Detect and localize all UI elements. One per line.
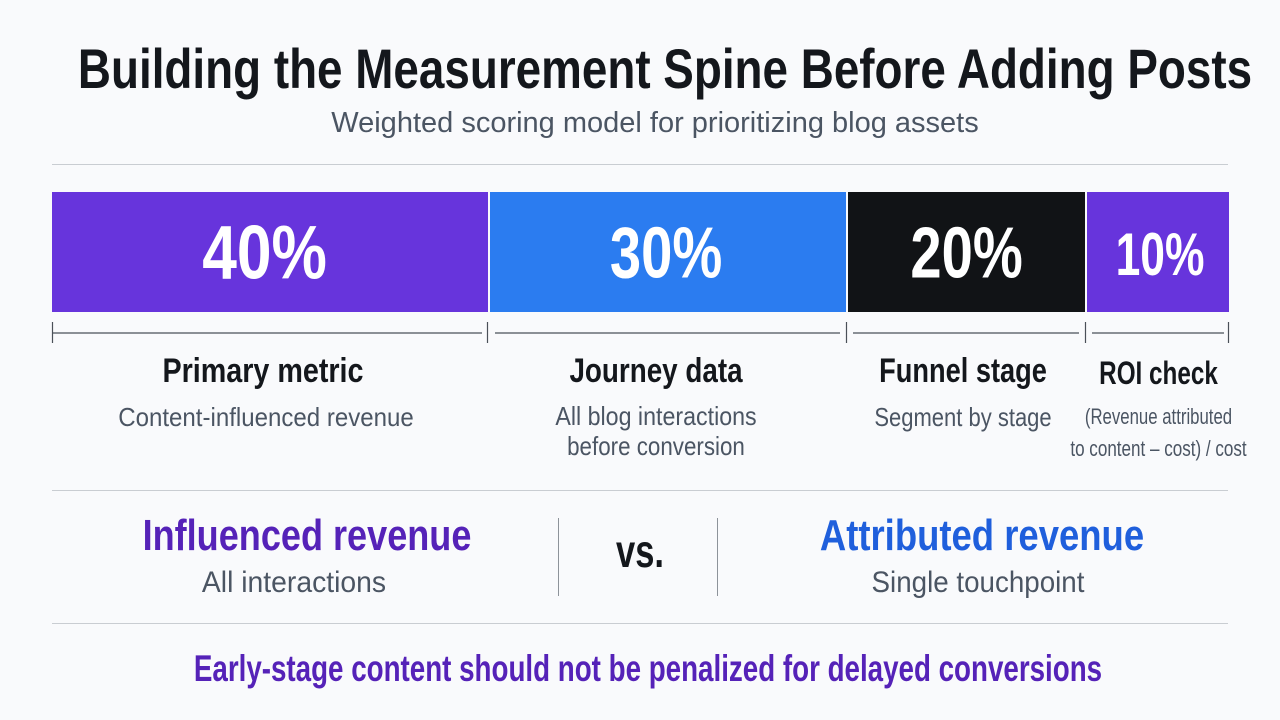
column: journey data: [555, 352, 757, 461]
segment 10%: [1087, 192, 1229, 312]
comparison: attributed revenue: [820, 511, 1144, 599]
column: journey data: All blog interactions: [555, 401, 757, 431]
column: primary metric: [118, 352, 414, 432]
column: funnel stage: Funnel stage: [879, 352, 1047, 390]
segment 40%: 40%: [202, 210, 327, 296]
comparison: attributed revenue: Single touchpoint: [871, 566, 1084, 599]
column: primary metric: Content-influenced revenue: [118, 402, 414, 432]
column: journey data: Journey data: [569, 352, 743, 390]
segment 40%: [52, 192, 488, 312]
segment 20%: 20%: [911, 214, 1023, 294]
column: funnel stage: [874, 352, 1051, 432]
subtitle: Weighted scoring model for prioritizing blog assets: [331, 107, 979, 139]
takeaway: Early-stage content should not be penalized for delayed conversions: [194, 648, 1102, 689]
column: primary metric: Primary metric: [162, 352, 363, 390]
weighted bar: [52, 192, 1229, 312]
segment 10%: 10%: [1116, 221, 1204, 288]
column: ROI check: to content – cost) / cost: [1070, 436, 1247, 461]
column: funnel stage: Segment by stage: [874, 402, 1051, 432]
vs label: vs.: [616, 525, 664, 577]
comparison: attributed revenue: Attributed revenue: [820, 511, 1144, 560]
title: Building the Measurement Spine Before Adding Posts: [78, 37, 1252, 100]
comparison: influenced revenue: All interactions: [202, 566, 386, 599]
segment 30%: [490, 192, 846, 312]
divider right: [717, 518, 718, 596]
divider left: [558, 518, 559, 596]
segment 30%: 30%: [610, 214, 722, 294]
comparison: influenced revenue: [143, 511, 471, 599]
segment 20%: [848, 192, 1085, 312]
column: ROI check: ROI check: [1099, 355, 1218, 391]
comparison: influenced revenue: Influenced revenue: [143, 511, 471, 560]
bracket ruler: [52, 322, 1230, 343]
column: journey data: before conversion: [567, 431, 745, 461]
column: ROI check: [1070, 355, 1247, 461]
column: ROI check: (Revenue attributed: [1085, 404, 1232, 429]
